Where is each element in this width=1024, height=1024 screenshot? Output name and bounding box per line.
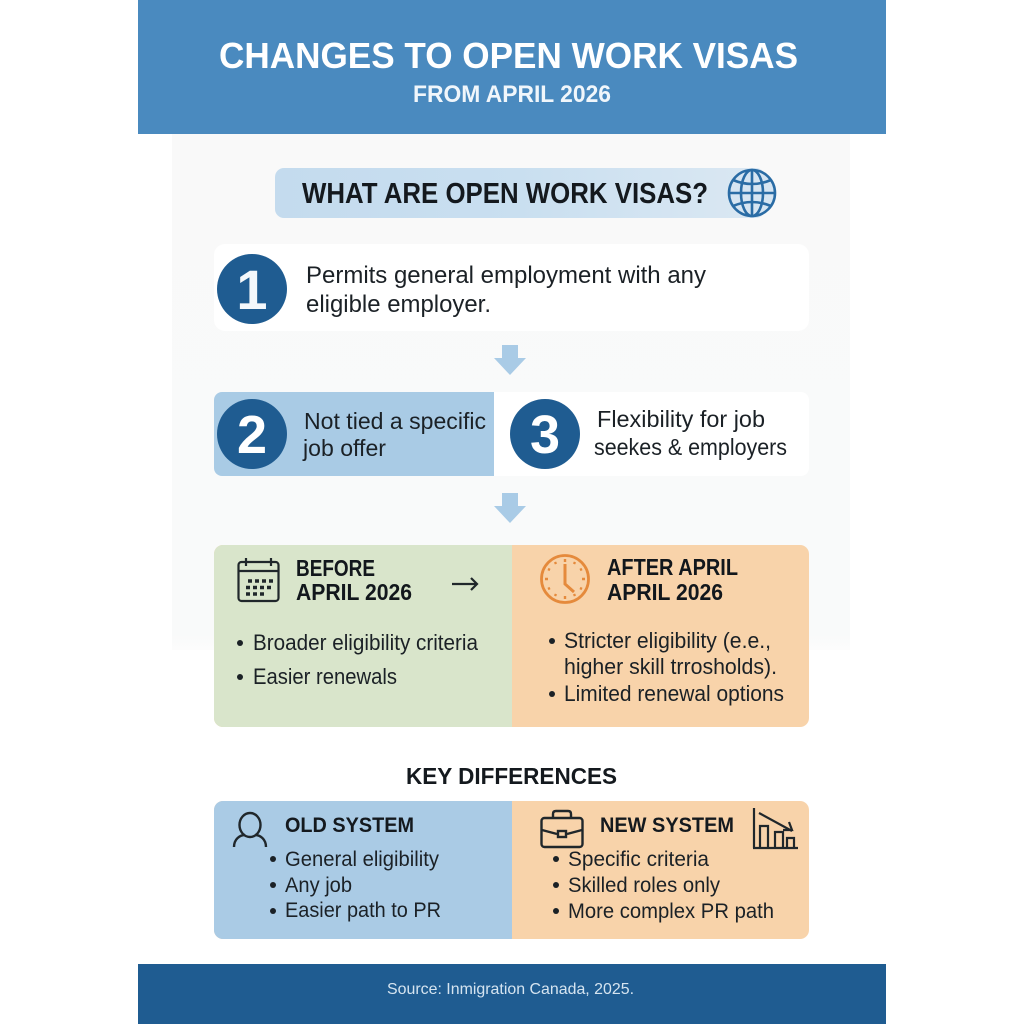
icon: clock — [542, 556, 588, 602]
point 3 text: seekes & employers — [594, 434, 787, 460]
subtitle: FROM APRIL 2026 — [413, 81, 611, 108]
icon: globe — [729, 170, 775, 216]
old system heading: OLD SYSTEM — [285, 814, 414, 837]
after list: higher skill trrosholds). — [564, 654, 777, 679]
before list — [237, 630, 478, 689]
arrow down 1 — [494, 345, 526, 375]
card 1: general employment — [214, 244, 809, 331]
point 2 text — [302, 408, 486, 461]
header banner — [138, 0, 886, 134]
number badge 3: 3 — [530, 405, 560, 465]
point 2 text: job offer — [302, 435, 386, 461]
old system list: Any job — [285, 873, 352, 897]
before list: Broader eligibility criteria — [253, 630, 478, 655]
after heading — [607, 554, 738, 605]
icon: person — [234, 813, 266, 847]
old system list: Easier path to PR — [285, 898, 441, 922]
card 1 text — [306, 262, 707, 318]
number badge 1 — [217, 254, 287, 324]
section heading: what are open work visas — [275, 168, 765, 218]
before heading: APRIL 2026 — [296, 579, 412, 605]
after list: Limited renewal options — [564, 681, 784, 706]
point 3 text: Flexibility for job — [597, 406, 765, 432]
after list — [549, 628, 784, 706]
source text: Source: Inmigration Canada, 2025. — [387, 981, 634, 998]
card row: points 2 and 3 — [214, 392, 809, 476]
icon: calendar — [238, 558, 278, 601]
main content background panel — [172, 134, 850, 650]
new system list: More complex PR path — [568, 899, 774, 923]
number badge 2 — [217, 399, 287, 469]
after list: Stricter eligibility (e.e., — [564, 628, 771, 653]
before heading — [296, 555, 412, 605]
comparison panel: old and new system — [214, 801, 809, 939]
new system list: Specific criteria — [568, 847, 709, 871]
card 1 text: Permits general employment with any — [306, 262, 707, 289]
point 3 text — [594, 406, 787, 460]
heading: key differences: KEY DIFFERENCES — [406, 763, 617, 789]
arrow right — [452, 578, 477, 590]
old system list: General eligibility — [285, 847, 439, 871]
icon: briefcase — [542, 811, 582, 847]
new system list: Skilled roles only — [568, 873, 720, 897]
before list: Easier renewals — [253, 664, 397, 689]
number badge 1: 1 — [236, 258, 268, 321]
before heading: BEFORE — [296, 555, 375, 581]
after heading: APRIL 2026 — [607, 579, 723, 605]
after heading: AFTER APRIL — [607, 554, 738, 580]
footer — [138, 964, 886, 1024]
arrow down 2 — [494, 493, 526, 523]
number badge 2: 2 — [237, 405, 267, 465]
number badge 3 — [510, 399, 580, 469]
section heading: what are open work visas: WHAT ARE OPEN WORK VISAS? — [302, 178, 708, 210]
title: CHANGES TO OPEN WORK VISAS — [219, 35, 798, 76]
comparison panel: before and after April 2026 — [214, 545, 809, 727]
point 2 text: Not tied a specific — [304, 408, 486, 434]
icon: declining bar chart — [753, 808, 798, 848]
card 1 text: eligible employer. — [306, 291, 491, 318]
old system list — [270, 847, 441, 922]
new system heading: NEW SYSTEM — [600, 814, 734, 837]
new system list — [553, 847, 774, 923]
